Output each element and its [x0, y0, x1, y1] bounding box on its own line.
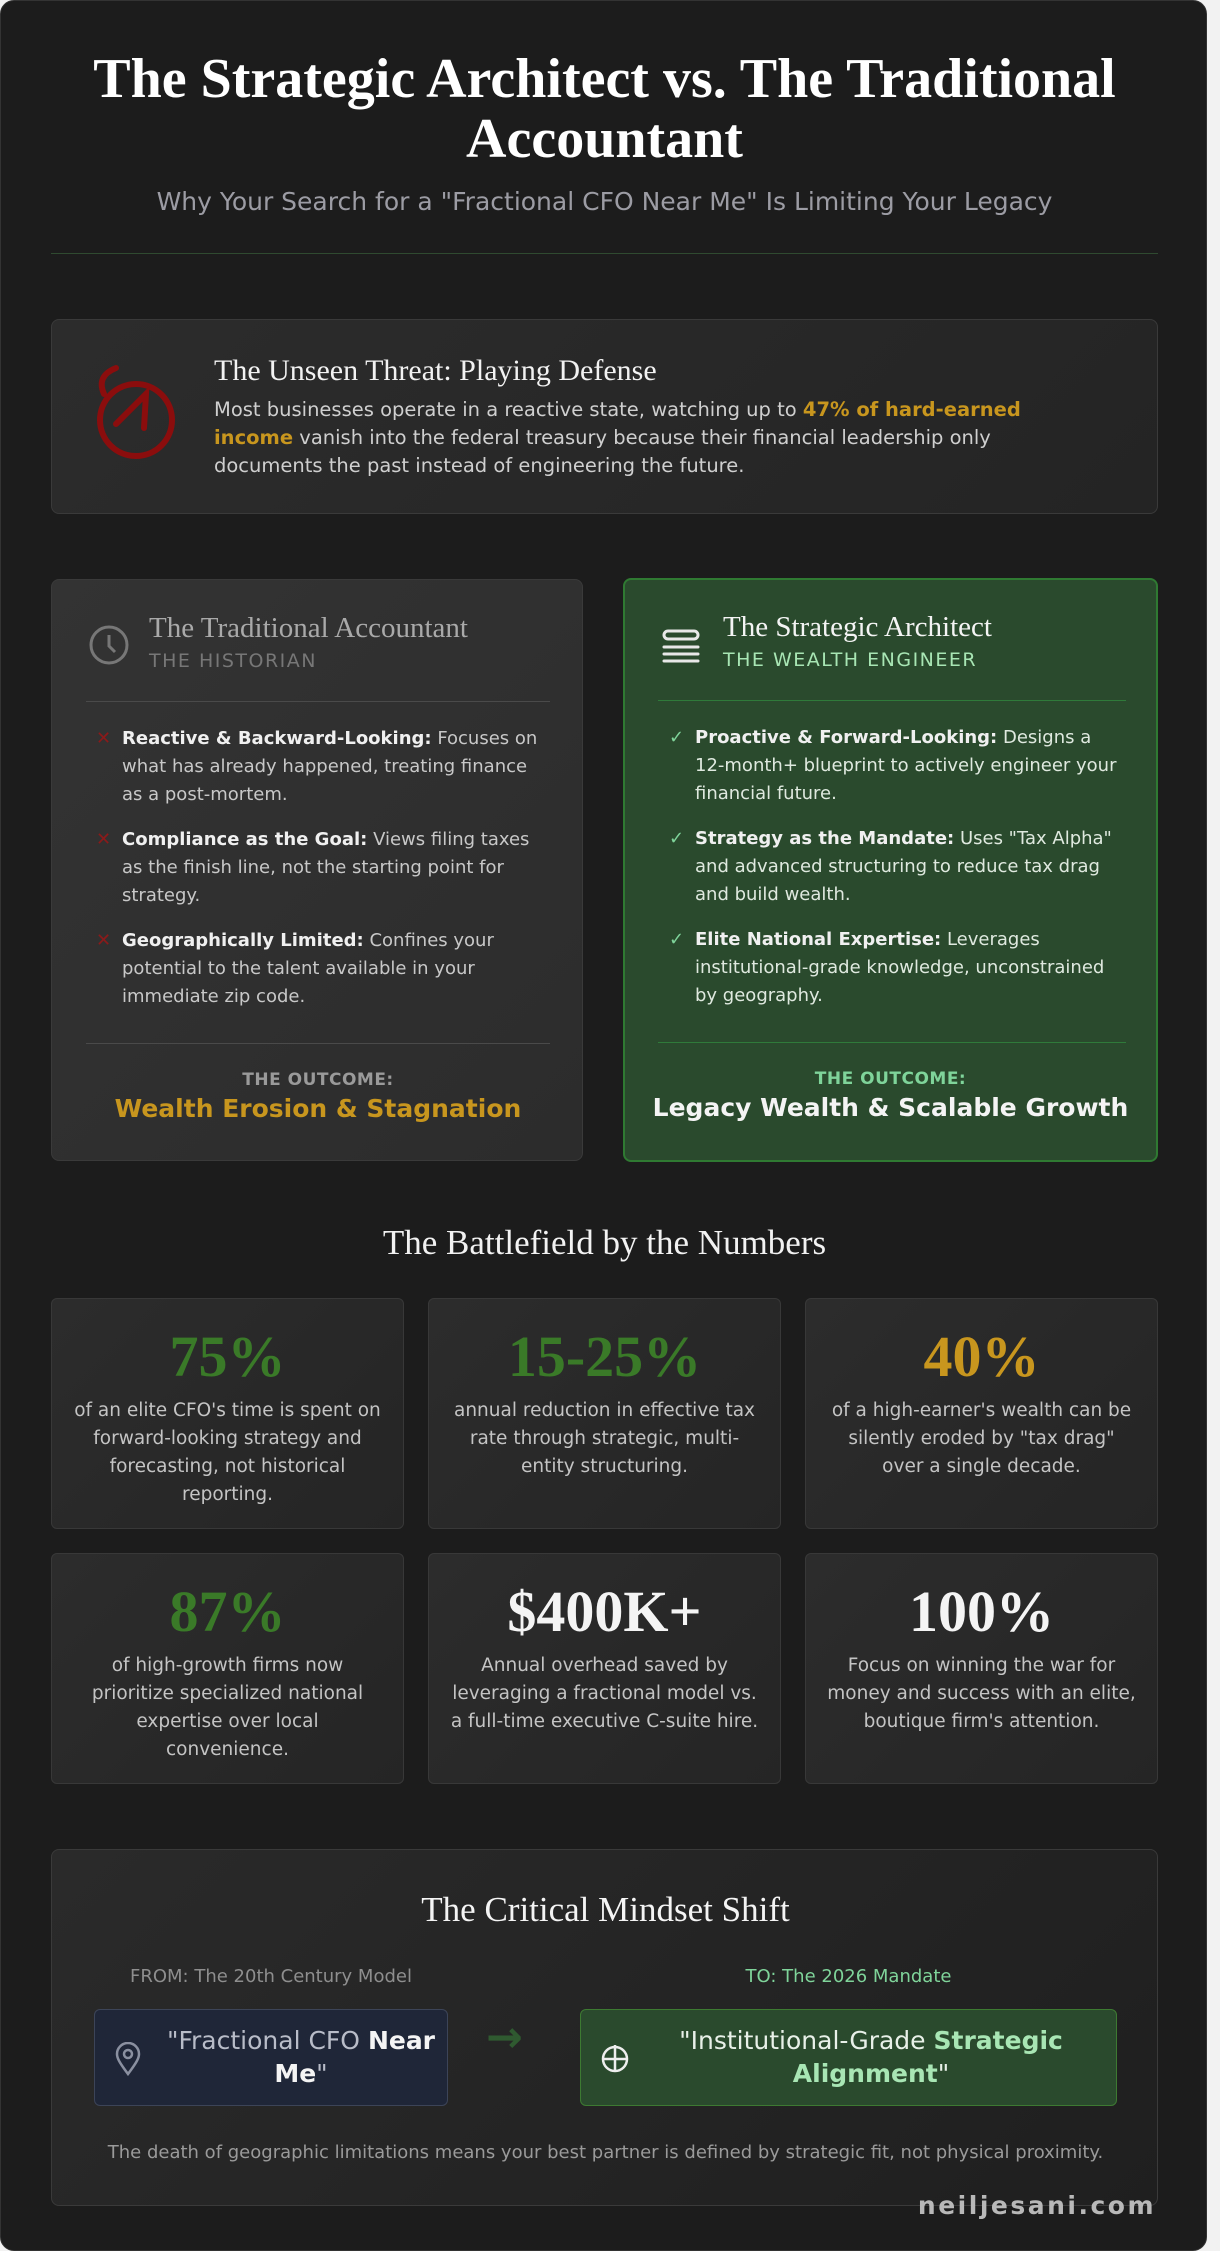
heading: The Strategic Architect: [723, 611, 992, 643]
arrow: →: [486, 2012, 523, 2063]
outcome: Legacy Wealth & Scalable Growth: [653, 1093, 1128, 1122]
from box: [94, 2009, 448, 2106]
stat: 15-25%: annual reduction in effective tax rate through strategic, multi-entity structuring.: [454, 1400, 755, 1477]
stat: 75%: [51, 1298, 404, 1529]
list: strengths: Proactive & Forward-Looking: Designs a 12-month+ blueprint to actively engineer your financial future.: [695, 727, 1116, 804]
stat: 40%: 40%: [924, 1324, 1040, 1389]
list: weaknesses: [96, 728, 537, 1007]
icon: stack: [662, 630, 700, 662]
stat: 100%: [805, 1553, 1158, 1784]
list: weaknesses: ✕: [96, 930, 111, 951]
panel: strategic architect: [623, 578, 1158, 1162]
from box: "Fractional CFO Near Me": [167, 2026, 435, 2088]
list: strengths: Elite National Expertise: Leverages institutional-grade knowledge, unconstrained by geography.: [695, 929, 1104, 1006]
outcome: THE OUTCOME:: [815, 1069, 966, 1089]
heading: numbers: The Battlefield by the Numbers: [383, 1223, 826, 1262]
watermark: neiljesani.com: [918, 2191, 1156, 2220]
list: strengths: ✓: [669, 828, 684, 849]
list: weaknesses: ✕: [96, 728, 111, 749]
stat: 100%: Focus on winning the war for money and success with an elite, boutique firm's attention.: [827, 1655, 1136, 1732]
list: weaknesses: Geographically Limited: Confines your potential to the talent available in your immediate zip code.: [122, 930, 494, 1007]
list: weaknesses: ✕: [96, 829, 111, 850]
from label: FROM: The 20th Century Model: [130, 1966, 412, 1987]
stat: $400K+: $400K+: [507, 1579, 702, 1644]
stat: 100%: 100%: [909, 1579, 1054, 1644]
outcome: THE OUTCOME:: [242, 1070, 394, 1090]
list: weaknesses: Compliance as the Goal: Views filing taxes as the finish line, not the starting point for strategy.: [122, 829, 529, 906]
list: weaknesses: Reactive & Backward-Looking: Focuses on what has already happened, treating finance as a post-mortem.: [122, 728, 537, 805]
heading: The Critical Mindset Shift: [421, 1890, 790, 1929]
stat: 15-25%: [428, 1298, 781, 1529]
panel: traditional accountant: THE HISTORIAN: [149, 650, 317, 672]
outcome: [653, 1069, 1128, 1122]
stat: 40%: [805, 1298, 1158, 1529]
heading: The Unseen Threat: Playing Defense: [214, 354, 657, 387]
list: strengths: ✓: [669, 929, 684, 950]
panel: mindset shift: [51, 1849, 1158, 2206]
body text: Most businesses operate in a reactive state, watching up to 47% of hard-earned income vanish into the federal treasury because their financial leadership only documents the past instead of engineering the future.: [214, 398, 1021, 477]
stat: 40%: of a high-earner's wealth can be silently eroded by "tax drag" over a single decade.: [832, 1400, 1131, 1477]
heading: The Traditional Accountant: [149, 612, 468, 644]
stat: 15-25%: 15-25%: [508, 1324, 701, 1389]
subtitle: Why Your Search for a "Fractional CFO Near Me" Is Limiting Your Legacy: [157, 187, 1052, 216]
to label: TO: The 2026 Mandate: [746, 1966, 951, 1987]
stat: 75%: of an elite CFO's time is spent on forward-looking strategy and forecasting, not historical reporting.: [74, 1400, 381, 1505]
panel: strategic architect: THE WEALTH ENGINEER: [723, 649, 977, 671]
outcome: [115, 1070, 521, 1123]
outcome: Wealth Erosion & Stagnation: [115, 1094, 521, 1123]
icon: threat: [97, 365, 175, 459]
stat: $400K+: Annual overhead saved by leveraging a fractional model vs. a full-time executive C-suite hire.: [451, 1655, 758, 1732]
panel: unseen threat: [51, 319, 1158, 514]
stat: 75%: 75%: [170, 1324, 286, 1389]
title: The Strategic Architect vs. The Traditional Accountant: [93, 48, 1116, 170]
to box: [580, 2009, 1117, 2106]
list: strengths: [669, 727, 1117, 1006]
stat: 87%: of high-growth firms now prioritize specialized national expertise over local convenience.: [92, 1655, 363, 1760]
stat: 87%: 87%: [170, 1579, 286, 1644]
to box: "Institutional-Grade Strategic Alignment": [679, 2026, 1063, 2088]
icon: clock: [90, 626, 128, 664]
stat: 87%: [51, 1553, 404, 1784]
stat: $400K+: [428, 1553, 781, 1784]
panel: traditional accountant: [51, 579, 583, 1161]
list: strengths: ✓: [669, 727, 684, 748]
footnote: The death of geographic limitations means your best partner is defined by strategic fit, not physical proximity.: [108, 2142, 1103, 2163]
list: strengths: Strategy as the Mandate: Uses "Tax Alpha" and advanced structuring to reduce tax drag and build wealth.: [695, 828, 1112, 905]
